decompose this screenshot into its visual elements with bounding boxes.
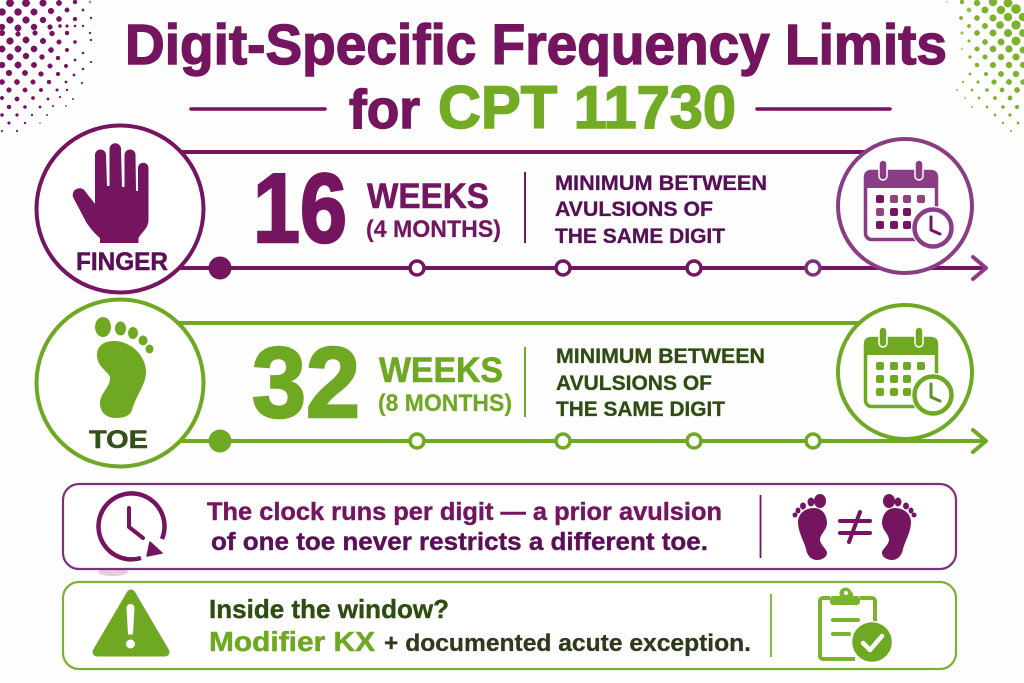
callout text: modifier KX: Modifier KX [209,626,375,657]
title [125,13,947,141]
title: CPT 11730 [438,74,736,141]
halftone dots: top right [946,0,1024,132]
timeline: toe [180,430,986,452]
title: for [349,78,420,140]
icon: hand in circle [36,126,204,292]
finger interval units [366,177,501,243]
toe description: THE SAME DIGIT [556,398,725,421]
halftone dots: top left [0,0,92,132]
icon: foot in circle: TOE [89,426,148,454]
finger description: THE SAME DIGIT [555,225,725,248]
panel: toe [36,300,986,466]
callout text: modifier KX: Inside the window? [209,594,449,624]
icon: foot in circle [36,300,204,466]
toe description: AVULSIONS OF [556,372,712,395]
finger interval units: (4 MONTHS) [366,216,501,243]
callout text: modifier KX: + documented acute exception. [384,630,751,657]
finger interval number: 16 [253,153,347,263]
icon: calendar with clock, green [838,305,972,439]
toe interval number: 32 [252,327,360,439]
callout text: per digit: The clock runs per digit — a prior avulsion [207,498,722,526]
finger description [555,172,767,248]
icon: calendar with clock, purple [838,139,972,273]
callout text: modifier KX [209,594,751,657]
toe description [556,345,765,421]
toe interval units: WEEKS [379,351,503,390]
finger description: MINIMUM BETWEEN [555,172,767,195]
icon: hand in circle: FINGER [76,248,168,276]
icon: clock with return arrow [99,493,165,559]
callout: inside the window [63,582,956,669]
callout text: per digit: of one toe never restricts a different toe. [211,528,708,556]
callout: clock runs per digit [63,484,956,576]
timeline: finger [180,256,986,280]
toe description: MINIMUM BETWEEN [556,345,765,368]
callout text: per digit [207,498,722,556]
finger description: AVULSIONS OF [555,198,713,221]
panel: finger [36,126,986,292]
icon: warning triangle [97,594,165,652]
toe interval units: (8 MONTHS) [378,390,512,417]
finger interval units: WEEKS [367,177,489,216]
icon: clipboard with check [820,587,892,662]
icon: foot not equal foot [792,494,916,560]
toe interval units [378,351,512,417]
title: Digit-Specific Frequency Limits [125,13,947,77]
